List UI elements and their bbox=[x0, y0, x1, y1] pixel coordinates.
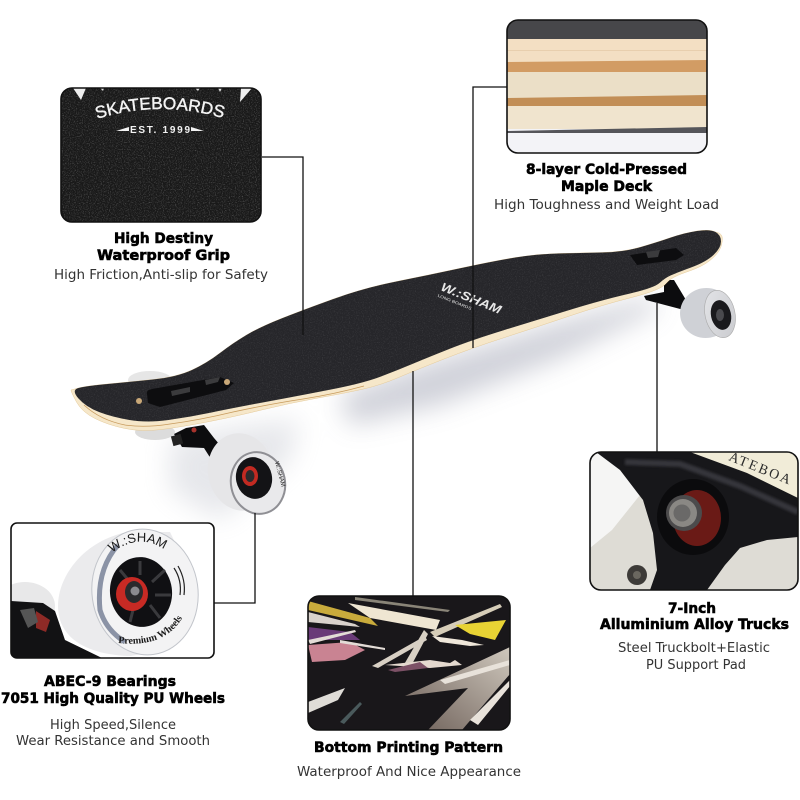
wheel face bbox=[91, 528, 199, 656]
wheel text: W.:SHAM bbox=[107, 532, 168, 552]
grip logo est bbox=[116, 126, 204, 133]
panel: deck cross-section bbox=[507, 20, 707, 153]
truck print letters: ATEBOA bbox=[727, 450, 794, 489]
description: grip: High Friction,Anti-slip for Safety bbox=[54, 268, 268, 283]
light background bbox=[590, 452, 640, 548]
wheel body bbox=[58, 532, 174, 656]
bolt bbox=[666, 495, 702, 531]
board wood edge bbox=[71, 230, 722, 431]
rear mounting plate bbox=[630, 248, 684, 265]
heading: grip: High Destiny bbox=[114, 231, 213, 247]
connector: deck to board edge bbox=[473, 87, 507, 348]
heading: wheels bbox=[1, 674, 225, 707]
deck logo: LONG BOARDS bbox=[437, 293, 473, 311]
wood layers bbox=[507, 20, 707, 153]
heading: grip: Waterproof Grip bbox=[97, 248, 230, 264]
chrome ring bbox=[99, 545, 125, 642]
grip logo est: EST. 1999 bbox=[130, 125, 190, 136]
connector: grip to board bbox=[262, 157, 303, 335]
description: wheels bbox=[16, 718, 210, 749]
front mounting plate bbox=[136, 377, 234, 407]
connector: truck card to rear truck bbox=[656, 303, 658, 452]
front wheel bbox=[201, 427, 291, 519]
connector: wheel card to front wheel bbox=[214, 513, 255, 603]
front wheel: W.:SHAM bbox=[273, 461, 286, 488]
print lower right strokes bbox=[405, 647, 510, 730]
heading: deck: Maple Deck bbox=[561, 179, 653, 195]
heading: deck: 8-layer Cold-Pressed bbox=[526, 162, 687, 178]
heading: trucks: 7-Inch bbox=[668, 601, 716, 617]
heading: trucks: Alluminium Alloy Trucks bbox=[600, 617, 789, 633]
print streaks bbox=[308, 601, 378, 626]
description: print: Waterproof And Nice Appearance bbox=[297, 765, 521, 780]
far front wheel bbox=[128, 371, 175, 440]
rear wheel in wheel photo bbox=[12, 582, 55, 610]
grip logo text: SKATEBOARDS bbox=[96, 97, 225, 118]
rear wheel bbox=[676, 284, 740, 342]
heading: wheels: 7051 High Quality PU Wheels bbox=[1, 691, 225, 707]
skateboard photo bbox=[60, 225, 740, 520]
truck highlight bbox=[625, 462, 798, 512]
description: trucks: PU Support Pad bbox=[646, 658, 746, 673]
grip texture bbox=[62, 88, 260, 222]
heading: deck bbox=[526, 162, 687, 195]
rear truck bbox=[644, 280, 686, 310]
description: trucks bbox=[618, 641, 770, 673]
heading: trucks bbox=[600, 601, 789, 633]
connector: print card to board underside bbox=[412, 371, 414, 596]
board shadow bbox=[170, 298, 660, 520]
wood ply line bbox=[84, 386, 364, 426]
truck in wheel photo bbox=[11, 601, 102, 658]
red bearing bbox=[116, 577, 148, 611]
description: deck: High Toughness and Weight Load bbox=[494, 198, 719, 213]
deck logo bbox=[437, 280, 505, 322]
heading: wheels: ABEC-9 Bearings bbox=[44, 674, 176, 690]
heading: print: Bottom Printing Pattern bbox=[314, 740, 503, 756]
description: trucks: Steel Truckbolt+Elastic bbox=[618, 641, 770, 656]
grip speckle bbox=[76, 230, 720, 422]
panel: grip close-up bbox=[60, 87, 262, 223]
pivot cup bbox=[657, 479, 729, 555]
truck hanger bbox=[596, 452, 798, 590]
description: wheels: Wear Resistance and Smooth bbox=[16, 734, 210, 749]
panel: print pattern close-up bbox=[308, 596, 510, 730]
deck logo: W.:SHAM bbox=[439, 280, 505, 317]
hub bbox=[110, 557, 172, 627]
deck behind truck bbox=[692, 452, 797, 498]
front truck bbox=[171, 425, 226, 470]
panel: wheel close-up bbox=[10, 522, 215, 659]
heading: grip bbox=[97, 231, 230, 264]
description: wheels: High Speed,Silence bbox=[50, 718, 176, 733]
board grip surface bbox=[75, 230, 721, 422]
base nut bbox=[627, 565, 647, 585]
panel: truck close-up bbox=[590, 450, 798, 590]
wheel text lower: Premium Wheels bbox=[118, 616, 182, 644]
